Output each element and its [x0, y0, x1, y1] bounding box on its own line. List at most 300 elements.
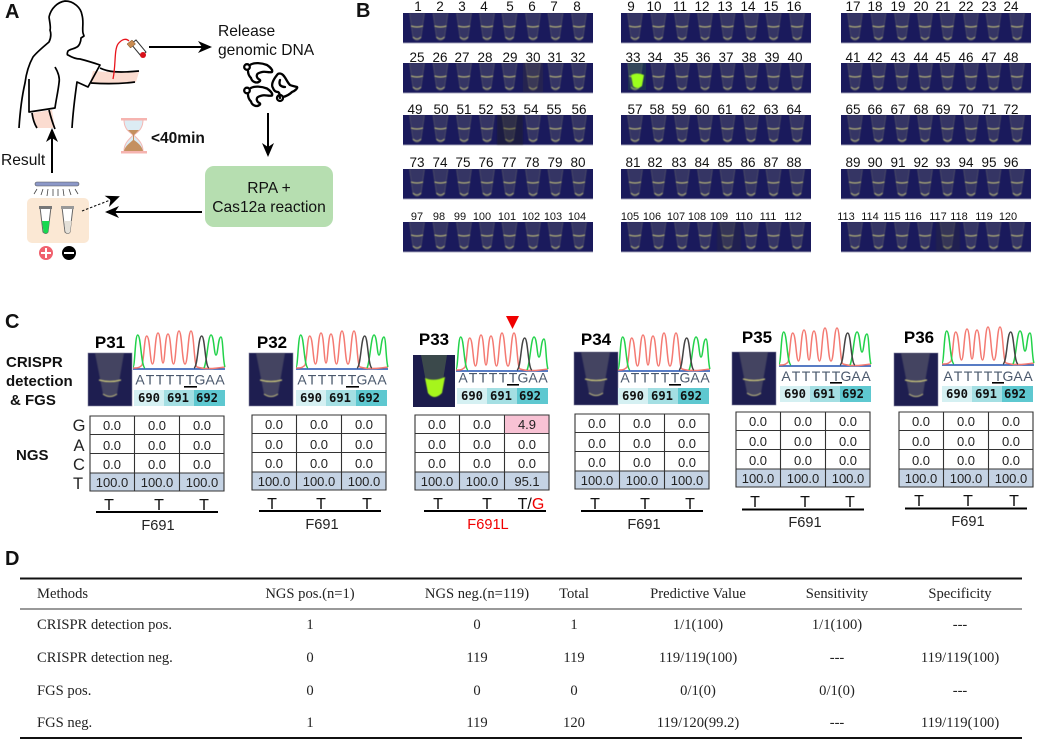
row: FGS neg.: 119: [466, 715, 488, 731]
table header: Methods: [37, 586, 88, 602]
strip: tubes 81-88: [621, 155, 811, 199]
panel C: per-patient detection results: [5, 311, 1034, 534]
sample P31: ATTTTTGAA: [135, 372, 225, 388]
sample P35: 691: [813, 387, 835, 401]
strip: tubes 65-72: 70: [958, 102, 974, 117]
sample P35: 690: [784, 387, 806, 401]
strip: tubes 73-80: 73: [409, 155, 425, 170]
row: FGS pos.: 0: [473, 683, 481, 699]
strip: tubes 49-56: 55: [546, 102, 562, 117]
strip: tubes 105-112: 105: [621, 211, 639, 223]
sample P33: positive, F691L mutation: P33: [419, 330, 449, 349]
sample P35: 0.0: [749, 414, 767, 429]
panel D: performance comparison table: [5, 548, 1022, 739]
strip: tubes 33-40 with positive tube 33: [621, 50, 811, 93]
strip: tubes 33-40 with positive tube 33: 35: [673, 50, 689, 65]
heading: B: B: [356, 0, 370, 22]
sample P36: F691: [951, 514, 985, 530]
strip: tubes 25-32: 26: [432, 50, 448, 65]
text: result: Result: [1, 152, 46, 169]
row: CRISPR detection pos.: 1/1(100): [812, 617, 862, 633]
sample P33: positive, F691L mutation: 692: [519, 389, 541, 403]
strip: tubes 57-64: 64: [786, 102, 802, 117]
base labels: G: [73, 417, 85, 435]
strip: tubes 113-120: 115: [883, 211, 901, 223]
strip: tubes 97-104: 98: [433, 211, 445, 223]
sample P32: 0.0: [265, 437, 283, 452]
sample P35: 0.0: [749, 434, 767, 449]
row: FGS neg.: FGS neg.: [37, 715, 92, 731]
table header: Total: [559, 586, 589, 602]
row: CRISPR detection pos.: ---: [953, 617, 967, 633]
table header: Specificity: [928, 586, 992, 602]
strip: tubes 25-32: 25: [409, 50, 425, 65]
row: FGS neg.: ---: [830, 715, 844, 731]
sample P34: 690: [622, 389, 644, 403]
sample P36: 0.0: [957, 453, 975, 468]
sample P33: positive, F691L mutation: 690: [461, 389, 483, 403]
strip: tubes 113-120: 114: [861, 211, 879, 223]
box: RPA + Cas12a reaction: Cas12a reaction: [212, 199, 326, 216]
strip: tubes 105-112: 106: [643, 211, 661, 223]
strip: tubes 41-48: 47: [981, 50, 997, 65]
strip: tubes 105-112: [621, 211, 811, 252]
strip: tubes 81-88: 85: [717, 155, 733, 170]
sample P36: 0.0: [957, 414, 975, 429]
strip: tubes 73-80: 77: [501, 155, 517, 170]
base labels: T: [73, 475, 83, 493]
strip: tubes 25-32: 27: [454, 50, 470, 65]
icon: blood sample tube: [113, 39, 146, 79]
sample P34: 100.0: [671, 473, 703, 488]
sample P32: T: [267, 496, 277, 513]
sample P31: 0.0: [148, 418, 166, 433]
strip: tubes 41-48: [841, 50, 1031, 93]
strip: tubes 33-40 with positive tube 33: 40: [787, 50, 803, 65]
row: CRISPR detection neg.: 119/119(100): [921, 650, 999, 666]
row: FGS pos.: 0/1(0): [819, 683, 855, 699]
strip: tubes 105-112: 107: [667, 211, 685, 223]
strip: tubes 81-88: 81: [625, 155, 641, 170]
sample P36: ATTTTTGAA: [943, 368, 1033, 384]
sample P31: 100.0: [141, 475, 173, 490]
sample P34: T: [640, 496, 650, 513]
sample P34: 0.0: [633, 455, 651, 470]
strip: tubes 97-104: 104: [568, 211, 586, 223]
row: FGS pos.: [37, 683, 967, 699]
sample P32: [249, 331, 388, 533]
strip: tubes 25-32: [403, 50, 593, 93]
strip: tubes 81-88: 83: [671, 155, 687, 170]
sample P35: 0.0: [749, 453, 767, 468]
sample P33: positive, F691L mutation: 0.0: [518, 456, 536, 471]
table header: NGS neg.(n=119): [425, 586, 529, 602]
strip: tubes 49-56: 54: [523, 102, 539, 117]
sample P34: 0.0: [633, 416, 651, 431]
strip: tubes 17-24: [841, 0, 1031, 43]
icon: positive: [39, 246, 53, 260]
sample P35: 0.0: [794, 414, 812, 429]
sample P35: T: [800, 494, 810, 511]
sample P32: 0.0: [265, 456, 283, 471]
strip: tubes 25-32: 28: [477, 50, 493, 65]
row: FGS neg.: 1: [306, 715, 314, 731]
table header: Predictive Value: [650, 586, 746, 602]
sample P33: positive, F691L mutation: F691L: [467, 517, 509, 533]
strip: tubes 49-56: 52: [478, 102, 494, 117]
strip: tubes 57-64: 61: [717, 102, 733, 117]
strip: tubes 1-8: [403, 0, 593, 43]
row: CRISPR detection pos.: [37, 617, 967, 633]
strip: tubes 73-80: 79: [547, 155, 563, 170]
strip: tubes 41-48: 48: [1003, 50, 1019, 65]
icon: hourglass: [121, 118, 147, 154]
sample P36: 0.0: [912, 414, 930, 429]
strip: tubes 65-72: 66: [867, 102, 883, 117]
sample P32: 692: [358, 391, 380, 405]
icon: patient silhouette: [19, 1, 139, 129]
sample P34: P34: [581, 330, 612, 349]
strip: tubes 33-40 with positive tube 33: 36: [695, 50, 711, 65]
heading: A: A: [5, 1, 19, 23]
sample P31: 692: [196, 391, 218, 405]
panel B: tube fluorescence grid: [356, 0, 1031, 252]
row: CRISPR detection neg.: 119: [466, 650, 488, 666]
sample P34: T: [590, 496, 600, 513]
sample P35: 692: [842, 387, 864, 401]
sample P31: 0.0: [193, 438, 211, 453]
row: FGS pos.: ---: [953, 683, 967, 699]
sample P33: positive, F691L mutation: 100.0: [466, 474, 498, 489]
row: CRISPR detection pos.: 1: [570, 617, 578, 633]
strip: tubes 81-88: 82: [647, 155, 663, 170]
sample P36: 100.0: [905, 471, 937, 486]
strip: tubes 65-72: 65: [845, 102, 861, 117]
sample P36: T: [1009, 493, 1019, 510]
sample P32: ATTTTTGAA: [297, 372, 387, 388]
strip: tubes 89-96: 94: [958, 155, 974, 170]
sample P32: 0.0: [310, 417, 328, 432]
strip: tubes 113-120: 119: [975, 211, 993, 223]
sample P32: 0.0: [310, 456, 328, 471]
strip: tubes 97-104: 100: [473, 211, 491, 223]
sample P32: 0.0: [355, 456, 373, 471]
strip: tubes 113-120: 113: [837, 211, 855, 223]
sample P36: 0.0: [912, 453, 930, 468]
sample P33: positive, F691L mutation: ATTTTTGAA: [458, 370, 548, 386]
icon: genomic DNA strands: [244, 63, 297, 106]
strip: tubes 73-80: 75: [455, 155, 471, 170]
box: RPA + Cas12a reaction: [205, 166, 333, 227]
row label: CRISPR detection and FGS: CRISPR: [6, 354, 63, 371]
strip: tubes 65-72: 67: [890, 102, 906, 117]
strip: tubes 41-48: 46: [958, 50, 974, 65]
sample P35: F691: [788, 515, 822, 531]
sample P31: T: [154, 497, 164, 514]
text: release genomic DNA: genomic DNA: [218, 42, 315, 59]
strip: tubes 105-112: 112: [784, 211, 802, 223]
row: CRISPR detection neg.: 119: [563, 650, 585, 666]
strip: tubes 25-32: 31: [547, 50, 563, 65]
text: under 40 minutes: <40min: [151, 130, 205, 147]
row: CRISPR detection neg.: ---: [830, 650, 844, 666]
sample P34: 100.0: [626, 473, 658, 488]
sample P31: 0.0: [148, 438, 166, 453]
sample P32: P32: [257, 333, 287, 352]
base labels: C: [73, 456, 85, 474]
row: CRISPR detection pos.: 1: [306, 617, 314, 633]
row: FGS pos.: 0: [570, 683, 578, 699]
strip: tubes 41-48: 45: [935, 50, 951, 65]
sample P35: 0.0: [839, 434, 857, 449]
strip: tubes 89-96: 91: [890, 155, 906, 170]
sample P33: positive, F691L mutation: [413, 316, 549, 533]
strip: tubes 97-104: 102: [522, 211, 540, 223]
strip: tubes 9-16: [621, 0, 811, 43]
sample P33: positive, F691L mutation: 691: [490, 389, 512, 403]
row label: CRISPR detection and FGS: detection: [6, 373, 73, 390]
sample P31: 0.0: [193, 457, 211, 472]
table header: Sensitivity: [806, 586, 869, 602]
sample P32: 100.0: [303, 474, 335, 489]
strip: tubes 33-40 with positive tube 33: 34: [647, 50, 663, 65]
sample P34: 0.0: [588, 436, 606, 451]
strip: tubes 57-64: 58: [649, 102, 665, 117]
strip: tubes 33-40 with positive tube 33: 33: [625, 50, 641, 65]
sample P34: 0.0: [678, 436, 696, 451]
row: CRISPR detection neg.: 0: [306, 650, 314, 666]
sample P36: 100.0: [950, 471, 982, 486]
strip: tubes 49-56: 56: [571, 102, 587, 117]
panel A: CRISPR detection workflow: [1, 1, 333, 260]
sample P31: [88, 331, 225, 534]
strip: tubes 57-64: 60: [694, 102, 710, 117]
sample P33: positive, F691L mutation: 95.1: [514, 474, 540, 489]
sample P32: 100.0: [258, 474, 290, 489]
sample P33: positive, F691L mutation: 100.0: [421, 474, 453, 489]
strip: tubes 73-80: [403, 155, 593, 199]
strip: tubes 33-40 with positive tube 33: 38: [741, 50, 757, 65]
text: release genomic DNA: Release: [218, 23, 275, 40]
sample P34: 0.0: [678, 455, 696, 470]
base labels: A: [73, 437, 85, 455]
strip: tubes 113-120: [837, 211, 1031, 252]
arrow: dashed viewing line: [82, 197, 118, 211]
sample P31: 0.0: [103, 438, 121, 453]
sample P33: positive, F691L mutation: 4.9: [518, 417, 536, 432]
strip: tubes 81-88: 86: [740, 155, 756, 170]
strip: tubes 41-48: 42: [867, 50, 883, 65]
strip: tubes 41-48: 43: [890, 50, 906, 65]
strip: tubes 81-88: 87: [763, 155, 779, 170]
sample P36: 0.0: [1002, 453, 1020, 468]
arrow: sample to DNA release: [149, 46, 210, 48]
strip: tubes 89-96: 93: [935, 155, 951, 170]
marker: mutation triangle: [506, 316, 519, 329]
heading: C: C: [5, 311, 19, 333]
sample P36: T: [963, 493, 973, 510]
sample P35: T: [845, 494, 855, 511]
sample P33: positive, F691L mutation: 0.0: [518, 437, 536, 452]
sample P34: 691: [651, 389, 673, 403]
sample P31: 0.0: [148, 457, 166, 472]
sample P33: positive, F691L mutation: T: [482, 496, 492, 513]
sample P33: positive, F691L mutation: T: [433, 496, 443, 513]
strip: tubes 89-96: 92: [913, 155, 929, 170]
sample P34: 692: [680, 389, 702, 403]
strip: tubes 97-104: [403, 211, 593, 252]
row: FGS neg.: [37, 715, 999, 731]
strip: tubes 33-40 with positive tube 33: 39: [764, 50, 780, 65]
strip: tubes 97-104: 101: [498, 211, 516, 223]
strip: tubes 65-72: 69: [935, 102, 951, 117]
sample P33: positive, F691L mutation: 0.0: [428, 456, 446, 471]
sample P31: 100.0: [186, 475, 218, 490]
sample P35: 100.0: [787, 471, 819, 486]
sample P32: 0.0: [355, 437, 373, 452]
sample P31: 100.0: [96, 475, 128, 490]
sample P33: positive, F691L mutation: 0.0: [473, 417, 491, 432]
strip: tubes 49-56: 49: [407, 102, 423, 117]
sample P35: 0.0: [794, 453, 812, 468]
strip: tubes 97-104: 99: [454, 211, 466, 223]
sample P32: 0.0: [265, 417, 283, 432]
strip: tubes 73-80: 74: [432, 155, 448, 170]
sample P34: 100.0: [581, 473, 613, 488]
sample P32: T: [316, 496, 326, 513]
strip: tubes 89-96: 90: [867, 155, 883, 170]
sample P34: ATTTTTGAA: [620, 370, 710, 386]
row: CRISPR detection neg.: 119/119(100): [659, 650, 737, 666]
strip: tubes 65-72: [841, 102, 1031, 145]
sample P31: P31: [95, 333, 125, 352]
strip: tubes 113-120: 116: [904, 211, 922, 223]
sample P35: T: [750, 494, 760, 511]
strip: tubes 73-80: 78: [524, 155, 540, 170]
row: FGS neg.: 119/120(99.2): [657, 715, 739, 731]
sample P36: P36: [904, 328, 934, 347]
row: CRISPR detection pos.: 1/1(100): [673, 617, 723, 633]
sample P33: positive, F691L mutation: T/G: [518, 496, 544, 513]
strip: tubes 65-72: 72: [1003, 102, 1019, 117]
arrow: reaction to UV readout: [107, 211, 202, 213]
sample P33: positive, F691L mutation: 0.0: [473, 456, 491, 471]
sample P36: 690: [946, 387, 968, 401]
row label: CRISPR detection and FGS: & FGS: [10, 392, 56, 409]
strip: tubes 81-88: 88: [786, 155, 802, 170]
strip: tubes 89-96: [841, 155, 1031, 199]
sample P35: P35: [742, 328, 772, 347]
row: CRISPR detection pos.: CRISPR detection pos.: [37, 617, 172, 633]
sample P36: 692: [1004, 387, 1026, 401]
strip: tubes 81-88: 84: [694, 155, 710, 170]
sample P36: 0.0: [912, 434, 930, 449]
row: FGS pos.: 0/1(0): [680, 683, 716, 699]
sample P35: ATTTTTGAA: [781, 368, 871, 384]
sample P35: 100.0: [742, 471, 774, 486]
sample P33: positive, F691L mutation: 0.0: [428, 417, 446, 432]
sample P31: 690: [138, 391, 160, 405]
sample P34: 0.0: [588, 416, 606, 431]
sample P31: 0.0: [103, 418, 121, 433]
row: CRISPR detection neg.: [37, 650, 999, 666]
box: fluorescence tubes: [27, 198, 89, 243]
strip: tubes 105-112: 108: [688, 211, 706, 223]
strip: tubes 65-72: 68: [913, 102, 929, 117]
sample P34: 0.0: [678, 416, 696, 431]
sample P34: 0.0: [588, 455, 606, 470]
sample P34: [574, 330, 710, 533]
sample P31: 0.0: [103, 457, 121, 472]
sample P33: positive, F691L mutation: 0.0: [473, 437, 491, 452]
sample P32: 0.0: [355, 417, 373, 432]
strip: tubes 97-104: 103: [544, 211, 562, 223]
sample P34: T: [685, 496, 695, 513]
strip: tubes 97-104: 97: [411, 211, 423, 223]
sample P32: T: [362, 496, 372, 513]
strip: tubes 113-120: 118: [950, 211, 968, 223]
strip: tubes 65-72: 71: [981, 102, 997, 117]
row: FGS pos.: FGS pos.: [37, 683, 91, 699]
sample P35: 0.0: [794, 434, 812, 449]
arrow: DNA to reaction: [267, 113, 269, 155]
strip: tubes 105-112: 109: [710, 211, 728, 223]
sample P36: 0.0: [1002, 414, 1020, 429]
sample P36: 0.0: [1002, 434, 1020, 449]
sample P32: 690: [300, 391, 322, 405]
strip: tubes 73-80: 76: [478, 155, 494, 170]
strip: tubes 49-56: 51: [456, 102, 472, 117]
sample P35: 0.0: [839, 453, 857, 468]
strip: tubes 49-56: [403, 102, 593, 145]
sample P31: 691: [167, 391, 189, 405]
sample P32: 0.0: [310, 437, 328, 452]
strip: tubes 25-32: 29: [502, 50, 518, 65]
sample P34: F691: [627, 517, 661, 533]
icon: negative: [62, 246, 76, 260]
strip: tubes 57-64: 63: [763, 102, 779, 117]
strip: tubes 25-32: 30: [525, 50, 541, 65]
sample P34: 0.0: [633, 436, 651, 451]
table header: NGS pos.(n=1): [265, 586, 355, 602]
sample P36: 0.0: [957, 434, 975, 449]
strip: tubes 41-48: 44: [913, 50, 929, 65]
strip: tubes 89-96: 95: [981, 155, 997, 170]
sample P31: 0.0: [193, 418, 211, 433]
strip: tubes 113-120: 120: [999, 211, 1017, 223]
row: FGS neg.: 119/119(100): [921, 715, 999, 731]
strip: tubes 57-64: [621, 102, 811, 145]
strip: tubes 57-64: 62: [740, 102, 756, 117]
sample P36: [894, 327, 1034, 530]
strip: tubes 113-120: 117: [929, 211, 947, 223]
strip: tubes 25-32: 32: [570, 50, 586, 65]
strip: tubes 89-96: 89: [845, 155, 861, 170]
strip: tubes 89-96: 96: [1003, 155, 1019, 170]
strip: tubes 105-112: 111: [760, 211, 776, 223]
strip: tubes 41-48: 41: [845, 50, 861, 65]
icon: UV lamp: [34, 182, 79, 196]
row: FGS neg.: 120: [563, 715, 585, 731]
sample P32: F691: [305, 517, 339, 533]
sample P35: [732, 328, 871, 531]
row: CRISPR detection neg.: CRISPR detection neg.: [37, 650, 173, 666]
strip: tubes 73-80: 80: [570, 155, 586, 170]
row: FGS pos.: 0: [306, 683, 314, 699]
strip: tubes 33-40 with positive tube 33: 37: [718, 50, 734, 65]
table header: [37, 586, 992, 602]
sample P31: T: [199, 497, 209, 514]
